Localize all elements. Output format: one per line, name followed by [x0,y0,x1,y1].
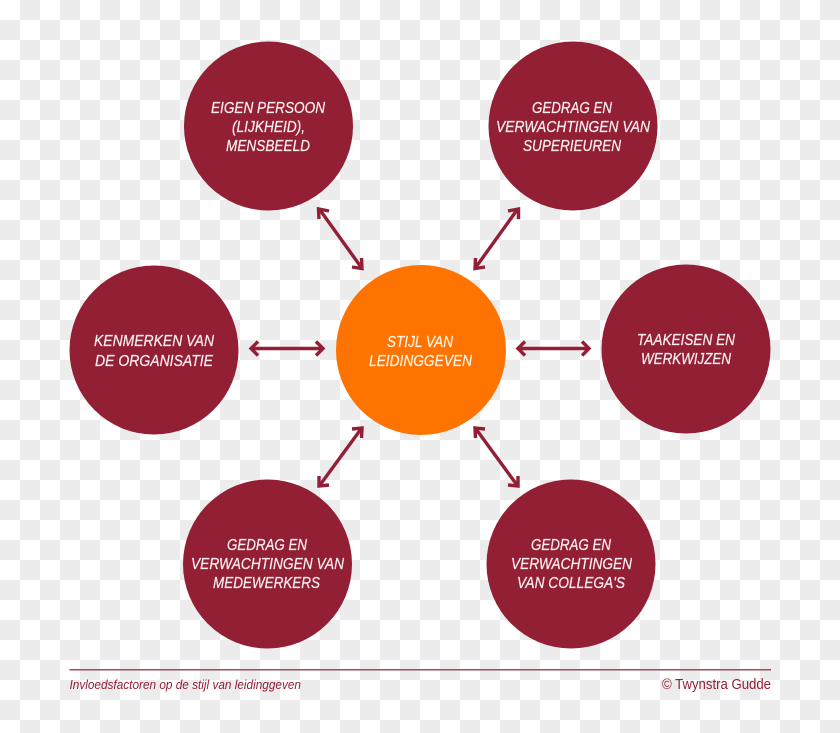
circle: organisatie [70,266,238,434]
circle: medewerkers [183,480,352,648]
circle: stijl van leidinggeven: LEIDINGGEVEN [369,353,472,370]
circle: organisatie: KENMERKEN VAN [94,333,214,350]
copyright: © Twynstra Gudde [662,676,771,693]
footer rule [70,669,771,670]
circle: collega's [486,480,656,648]
circle: taakeisen [602,264,770,434]
circle: taakeisen: WERKWIJZEN [641,351,731,368]
circle: medewerkers: GEDRAG EN [227,537,307,554]
circle: eigen persoon: MENSBEELD [226,138,310,155]
arrow: right [518,342,589,356]
circle: medewerkers: MEDEWERKERS [213,575,320,592]
circle: medewerkers: VERWACHTINGEN VAN [191,556,344,573]
arrow: bottom left [319,428,362,486]
circle: superieuren: GEDRAG EN [532,100,612,117]
arrow: top right [475,209,518,268]
circle: superieuren: VERWACHTINGEN VAN [496,119,650,136]
circle: collega's: VAN COLLEGA'S [517,575,625,592]
circle: eigen persoon: EIGEN PERSOON [211,100,325,117]
circle: eigen persoon: (LIJKHEID), [232,119,305,136]
circle: taakeisen: TAAKEISEN EN [637,332,735,349]
arrow: top left [318,209,362,268]
arrow: left [251,342,323,356]
circle: stijl van leidinggeven [336,265,506,435]
circle: collega's: GEDRAG EN [531,537,611,554]
circle: superieuren: SUPERIEUREN [523,138,621,155]
caption: Invloedsfactoren op de stijl van leidinggeven [70,677,301,692]
arrow: bottom right [475,428,518,486]
circle: superieuren [488,42,658,210]
circle: organisatie: DE ORGANISATIE [95,353,213,370]
circle: eigen persoon [184,42,353,210]
circle: stijl van leidinggeven: STIJL VAN [387,334,453,351]
circle: collega's: VERWACHTINGEN [511,556,632,573]
